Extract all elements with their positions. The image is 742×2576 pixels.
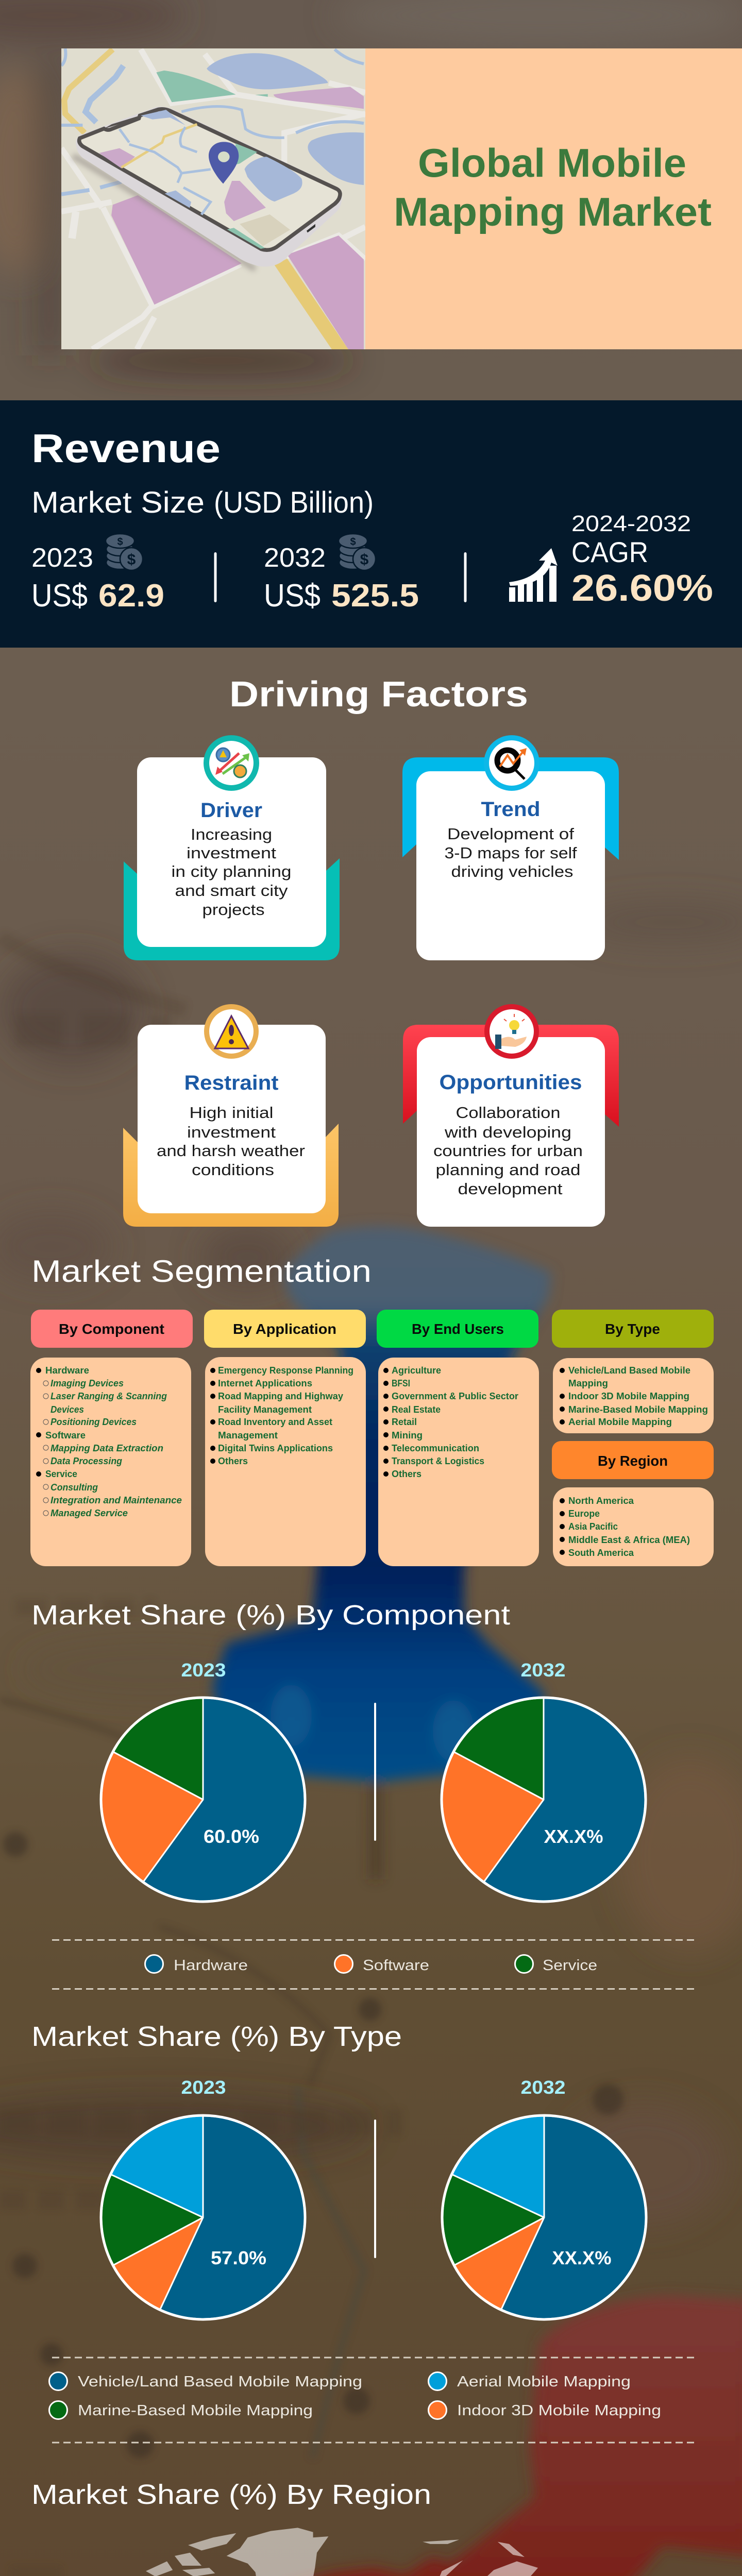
- end users list: BFSI: [392, 1378, 410, 1388]
- legend: component: Hardware: [174, 1957, 248, 1974]
- pie chart: type 2032: XX.X%: [552, 2247, 611, 2268]
- icon: growth chart with arrow: [509, 548, 558, 602]
- region list: South America: [568, 1548, 634, 1558]
- application list: Facility Management: [218, 1404, 312, 1415]
- component list: Integration and Maintenance: [50, 1495, 182, 1505]
- 2032 value: [264, 543, 419, 614]
- icon: restraint: [204, 1004, 259, 1059]
- type list: Marine-Based Mobile Mapping: [568, 1404, 708, 1415]
- restraint text: conditions: [192, 1161, 274, 1179]
- application list: Internet Applications: [218, 1378, 312, 1388]
- revenue heading: Revenue: [31, 426, 221, 471]
- trend text: driving vehicles: [451, 862, 573, 880]
- hero illustration: phone on map: [61, 48, 365, 349]
- panel: driver: [124, 735, 340, 960]
- opportunities text: with developing: [444, 1123, 571, 1141]
- heading: driving factors: Driving Factors: [229, 674, 528, 714]
- segment: by type: [552, 1310, 714, 1433]
- end users list: Real Estate: [392, 1404, 441, 1415]
- application list: [210, 1365, 353, 1466]
- pie chart: component 2032: XX.X%: [544, 1826, 603, 1847]
- icon: coins 2032: $: [360, 551, 369, 568]
- application list: Road Inventory and Asset: [218, 1417, 332, 1427]
- driver text: in city planning: [171, 862, 292, 880]
- segment: by end users: [377, 1310, 539, 1566]
- revenue band: [0, 400, 742, 648]
- icon: coins 2023: [106, 534, 143, 570]
- type list: Mapping: [568, 1378, 608, 1388]
- restraint text: investment: [187, 1123, 276, 1141]
- component list: Consulting: [50, 1482, 98, 1493]
- panel: opportunities: [403, 1004, 619, 1227]
- hero title text: Global Mobile: [418, 140, 686, 185]
- segment: by application: [204, 1310, 366, 1566]
- legend: type: [49, 2372, 661, 2419]
- driver text: projects: [202, 901, 265, 919]
- 2032 value: US$: [264, 578, 321, 614]
- icon: driver: [204, 735, 259, 791]
- year label 2032: 2032: [520, 1659, 566, 1681]
- legend: component: Software: [363, 1957, 429, 1974]
- vertical divider: [374, 2120, 376, 2258]
- segment: by component: By Component: [59, 1321, 164, 1337]
- opportunities text: development: [458, 1180, 563, 1198]
- end users list: Agriculture: [392, 1365, 441, 1376]
- component list: Devices: [50, 1404, 84, 1415]
- component list: Mapping Data Extraction: [50, 1443, 163, 1453]
- component list: [36, 1365, 182, 1518]
- type list: Aerial Mobile Mapping: [568, 1417, 672, 1427]
- segment: by region: By Region: [598, 1453, 668, 1469]
- application list: Digital Twins Applications: [218, 1443, 333, 1453]
- driver text: investment: [187, 844, 276, 862]
- icon: opportunities: [484, 1004, 539, 1059]
- end users list: Mining: [392, 1430, 423, 1440]
- legend: type: Indoor 3D Mobile Mapping: [457, 2402, 661, 2419]
- market size label: Market Size: [31, 486, 205, 519]
- restraint text: High initial: [190, 1104, 273, 1122]
- trend text: Development of: [447, 825, 574, 843]
- restraint text: [157, 1104, 305, 1179]
- pie chart: type 2032: [442, 2115, 646, 2319]
- heading: market share by type: Market Share (%) By Type: [31, 2021, 402, 2052]
- trend text: 3-D maps for self: [444, 844, 577, 862]
- component list: Service: [45, 1469, 77, 1479]
- hero title panel: [364, 48, 742, 349]
- vertical divider: [374, 1703, 376, 1841]
- opportunities text: Collaboration: [456, 1104, 561, 1122]
- type list: Vehicle/Land Based Mobile: [568, 1365, 690, 1376]
- region list: Middle East & Africa (MEA): [568, 1535, 690, 1545]
- legend: type: Vehicle/Land Based Mobile Mapping: [78, 2374, 362, 2390]
- 2023 value: 2023: [31, 543, 93, 573]
- CAGR block: [571, 511, 713, 609]
- component list: Software: [45, 1430, 86, 1440]
- segment: by application: By Application: [233, 1321, 336, 1337]
- icon: trend: [484, 735, 539, 791]
- CAGR block: CAGR: [571, 536, 648, 568]
- type list: [560, 1365, 708, 1427]
- type list: Indoor 3D Mobile Mapping: [568, 1391, 689, 1401]
- region list: Asia Pacific: [568, 1521, 618, 1532]
- 2032 value: 525.5: [331, 578, 419, 614]
- opportunities text: countries for urban: [433, 1142, 583, 1160]
- heading: market segmentation: Market Segmentation: [31, 1254, 372, 1289]
- region list: [560, 1496, 690, 1558]
- driver text: Increasing: [191, 825, 272, 843]
- driver text: [171, 825, 292, 919]
- 2023 value: US$: [31, 578, 88, 614]
- end users list: Transport & Logistics: [392, 1456, 484, 1466]
- opportunities text: planning and road: [436, 1161, 580, 1179]
- divider: [464, 552, 467, 602]
- year label 2032: 2032: [520, 2077, 566, 2098]
- year label 2023: 2023: [181, 2077, 226, 2098]
- trend text: [444, 825, 577, 880]
- component list: Managed Service: [50, 1508, 128, 1518]
- application list: Road Mapping and Highway: [218, 1391, 343, 1401]
- trend title: Trend: [481, 798, 540, 821]
- blurred red pin: [232, 2296, 742, 2576]
- 2023 value: [31, 543, 164, 614]
- panel: restraint: [123, 1004, 339, 1227]
- region list: Europe: [568, 1509, 600, 1519]
- segment: by end users: By End Users: [412, 1321, 504, 1337]
- hero title text: Mapping Market: [394, 189, 712, 234]
- opportunities title: Opportunities: [439, 1071, 582, 1094]
- CAGR block: 2024-2032: [571, 511, 691, 536]
- legend: type: Aerial Mobile Mapping: [457, 2374, 631, 2390]
- legend: component: [145, 1955, 597, 1974]
- CAGR block: 26.60%: [571, 568, 713, 609]
- component list: Hardware: [45, 1365, 89, 1376]
- pie chart: type 2023: [101, 2115, 305, 2319]
- heading: market share by region: Market Share (%) By Region: [31, 2479, 431, 2510]
- component list: Laser Ranging & Scanning: [50, 1391, 167, 1401]
- segment: by region: [552, 1441, 714, 1566]
- legend: type: Marine-Based Mobile Mapping: [78, 2402, 313, 2419]
- restraint title: Restraint: [184, 1072, 278, 1094]
- heading: market share by component: Market Share (%) By Component: [31, 1600, 510, 1631]
- icon: coins 2023: $: [117, 536, 123, 548]
- divider: [214, 552, 216, 602]
- icon: coins 2032: $: [350, 536, 356, 548]
- end users list: Others: [392, 1469, 421, 1479]
- component list: Positioning Devices: [50, 1417, 137, 1427]
- end users list: Government & Public Sector: [392, 1391, 518, 1401]
- application list: Others: [218, 1456, 248, 1466]
- icon: coins 2023: $: [127, 551, 136, 568]
- end users list: [383, 1365, 518, 1479]
- segment: by component: [30, 1310, 193, 1566]
- application list: Management: [218, 1430, 278, 1440]
- market size label: (USD Billion): [214, 486, 374, 519]
- segment: by type: By Type: [605, 1321, 660, 1337]
- world map: [146, 2528, 538, 2576]
- pie chart: component 2023: [101, 1698, 305, 1902]
- driver text: and smart city: [175, 882, 288, 900]
- blurred blue pin: [213, 1226, 551, 1879]
- 2023 value: 62.9: [98, 578, 164, 614]
- driver title: Driver: [200, 799, 262, 822]
- pie chart: component 2032: [442, 1698, 646, 1902]
- panel: trend: [402, 735, 619, 960]
- pie chart: component 2023: 60.0%: [204, 1826, 259, 1847]
- legend: component: Service: [543, 1957, 597, 1974]
- component list: Imaging Devices: [50, 1378, 124, 1388]
- hero title text: [394, 140, 712, 234]
- 2032 value: 2032: [264, 543, 326, 573]
- application list: Emergency Response Planning: [218, 1365, 353, 1376]
- year label 2023: 2023: [181, 1659, 226, 1681]
- icon: coins 2032: [339, 534, 376, 570]
- hero header: [61, 48, 742, 349]
- opportunities text: [433, 1104, 583, 1198]
- region list: North America: [568, 1496, 634, 1506]
- pie chart: type 2023: 57.0%: [211, 2247, 266, 2268]
- end users list: Telecommunication: [392, 1443, 479, 1453]
- end users list: Retail: [392, 1417, 417, 1427]
- restraint text: and harsh weather: [157, 1142, 305, 1160]
- component list: Data Processing: [50, 1456, 122, 1466]
